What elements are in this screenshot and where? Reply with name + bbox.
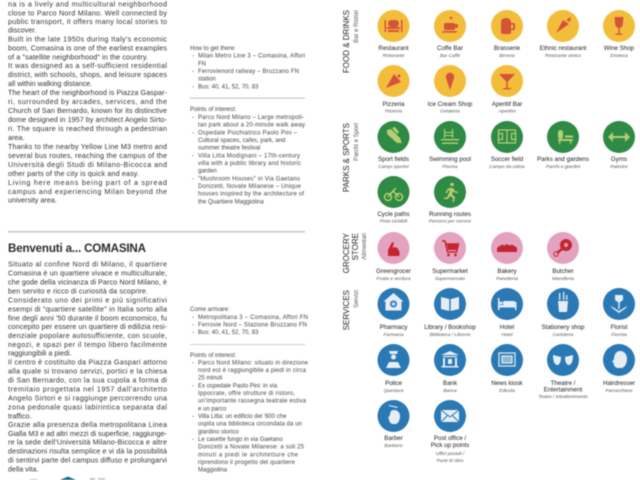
- item: News kiosk: News kiosk: [491, 380, 524, 387]
- text block: Italian points of interest: Le casette fungo in via Gaetano: [198, 437, 283, 443]
- item: Greengrocer: Greengrocer: [376, 268, 411, 275]
- text block: Italian points of interest: riprendono il progetto del quartiere: [198, 460, 296, 466]
- text block: Italian introduction: raggiungibili a piedi.: [8, 349, 72, 358]
- item: Wine Shop: Wine Shop: [604, 45, 635, 52]
- item: Cycle paths: Piste ciclabili: [380, 218, 408, 224]
- text block: Italian introduction: Comasina è un quartiere vivace e multiculturale,: [8, 269, 167, 278]
- text block: Italian points of interest: Maggiolina: [198, 468, 228, 474]
- text block: Italian points of interest: -: [192, 384, 194, 390]
- item: Soccer field: Campo da calcio: [489, 164, 525, 170]
- text block: Italian points of interest: e un parco: [198, 406, 227, 412]
- text block: Italian points of interest: [190, 353, 309, 474]
- text block: Italian introduction: che gode della vicinanza di Parco Nord Milano, è: [8, 278, 167, 287]
- item: Parks and gardens: [537, 121, 589, 170]
- item: Aperitif Bar: [491, 65, 523, 114]
- item: Police: Police: [385, 380, 402, 387]
- text block: English how to get there: station: [198, 77, 216, 83]
- item: Soccer field: Soccer field: [491, 156, 524, 163]
- item: Barber: Barber: [384, 435, 403, 442]
- text block: Italian introduction: Il centro è costituito da Piazza Gaspari attorno: [8, 358, 167, 367]
- item: Ethnic restaurant: Ethnic restaurant: [540, 45, 587, 52]
- item: Pizzeria: Pizzeria: [382, 101, 405, 108]
- item: Hairdresser: Parrucchiere: [605, 388, 633, 394]
- text block: English points of interest: Parco Nord Milano – Large metropoli-: [198, 115, 304, 121]
- item: Soccer field: [489, 121, 525, 170]
- text block: English introduction: ri, surrounded by arcades, services, and the: [8, 97, 167, 106]
- text block: Italian points of interest: -: [192, 437, 194, 443]
- text block: English points of interest: Donizetti, Novate Milanese – Unique: [198, 184, 302, 190]
- text block: English introduction: Church of San Bernardo, known for its distinctive: [8, 106, 167, 115]
- item: Coffee Bar: [434, 10, 466, 59]
- text block: Italian introduction: denziale popolare autosufficiente, con scuole,: [8, 331, 167, 340]
- item: Post office and Pick up points: [431, 400, 469, 464]
- text block: Italian points of interest: Villa Litta: un edificio del '600 che: [198, 414, 287, 420]
- text block: Italian introduction: della vita.: [8, 464, 38, 473]
- item: Hairdresser: Hairdresser: [603, 380, 635, 387]
- item: Pharmacy: Farmacia: [384, 332, 404, 338]
- text block: Italian introduction: Considerato uno dei primi e più significativi: [8, 296, 167, 305]
- item: Coffee Bar: Coffe Bar: [437, 45, 463, 52]
- text block: Italian introduction: esempi di "quartiere satellite" in Italia sorto alla: [8, 304, 167, 313]
- category label: Services: [342, 290, 360, 330]
- text block: English how to get there: How to get there:: [190, 46, 236, 52]
- item: Police: Questura: [384, 388, 404, 394]
- item: Hotel: Hotel: [500, 324, 514, 331]
- item: Post office and Pick up points: Post office /: [434, 435, 466, 442]
- text block: Italian how to get there: Metropolitana 3 – Comasina, Affori FN: [198, 315, 308, 321]
- text block: English points of interest: [190, 107, 305, 205]
- text block: English points of interest: Ospedale Psichiatrico Paolo Pini –: [198, 130, 298, 136]
- divider: Italian right column: [190, 344, 305, 345]
- text block: English how to get there: -: [192, 69, 194, 75]
- item: Parks and gardens: Parchi e giardini: [546, 164, 581, 170]
- text block: English introduction: boom, Comasina is one of the earliest examples: [8, 44, 167, 53]
- text block: Italian points of interest: -: [192, 414, 194, 420]
- item: Running routes: Running routes: [429, 211, 471, 218]
- text block: English introduction: Università degli Studi di Milano-Bicocca and: [8, 160, 167, 169]
- text block: Italian introduction: di San Bernardo, con la sua cupola a forma di: [8, 375, 167, 384]
- text block: English how to get there: Ferrovienord railway – Bruzzano FN: [198, 69, 299, 75]
- item: Hotel: Hotel: [501, 332, 514, 338]
- text block: Italian points of interest: minuti a piedi le architetture che: [198, 452, 299, 458]
- item: Butcher: [547, 232, 579, 282]
- item: Supermarket: Supermercato: [435, 276, 465, 282]
- text block: English introduction: dome designed in 1957 by architect Angelo Sirto-: [8, 115, 168, 124]
- text block: English how to get there: Milan Metro Line 3 – Comasina, Affori: [198, 54, 305, 60]
- item: Pizzeria: [378, 65, 410, 114]
- item: Theatre and Entertainment: Theatre /: [551, 380, 576, 387]
- text block: English introduction: several bus routes, reaching the campus of the: [8, 151, 167, 160]
- text block: English points of interest: Points of interest:: [190, 107, 237, 113]
- item: Swimming pool: Swimming pool: [429, 156, 471, 163]
- text block: English introduction: university area.: [8, 196, 57, 204]
- item: Theatre and Entertainment: [538, 344, 588, 400]
- item: Pharmacy: Pharmacy: [380, 324, 408, 331]
- text block: Italian points of interest: giardino storico: [198, 429, 239, 435]
- text block: English introduction: close to Parco Nord Milano. Well connected by: [8, 8, 167, 17]
- item: Restaurant: Restaurant: [378, 45, 409, 52]
- text block: English points of interest: houses inspired by the architecture of: [198, 192, 304, 198]
- divider: between languages: [8, 231, 305, 232]
- item: Gyms: Gyms: [611, 156, 627, 163]
- item: Florist: Fiorista: [611, 332, 627, 338]
- category label: Parks and Sports: PARKS & SPORTS: [342, 123, 351, 192]
- item: Hotel: [491, 288, 523, 338]
- item: Brasserie: Birreria: [499, 53, 515, 59]
- text block: Italian how to get there: Ferrovie Nord – Stazione Bruzzano FN: [198, 322, 307, 328]
- item: Supermarket: Supermarket: [432, 268, 468, 275]
- text block: English points of interest: -: [192, 153, 194, 159]
- item: News kiosk: [491, 344, 524, 394]
- item: Cycle paths: [377, 176, 410, 224]
- item: Bank: Bank: [443, 380, 458, 387]
- category label: Grocery Store: Alimentari: [362, 233, 368, 260]
- category label: Services: SERVICES: [342, 290, 351, 330]
- text block: Italian introduction: fine degli anni '50 durante il boom economico, fu: [8, 313, 167, 322]
- text block: Italian points of interest: ospita una biblioteca circondata da un: [198, 422, 302, 428]
- text block: Italian introduction: zona pedonale quasi labirintica separata dal: [8, 402, 167, 411]
- text block: Italian introduction: Angelo Sirtori e si raggiunge percorrendo una: [8, 393, 167, 402]
- item: Supermarket: [432, 232, 468, 282]
- text block: Italian how to get there: -: [192, 330, 194, 336]
- item: Sport fields: Sport fields: [378, 156, 409, 163]
- item: Greengrocer: Frutta e verdura: [376, 276, 411, 282]
- item: Bank: [434, 344, 466, 394]
- item: Running routes: [429, 176, 472, 224]
- category label: Grocery Store: [342, 232, 368, 273]
- text block: English points of interest: tan park about a 20-minute walk away: [198, 123, 305, 129]
- item: Restaurant: [378, 10, 410, 59]
- item: Sport fields: Campi sportivi: [378, 164, 410, 170]
- category label: Parks and Sports: [342, 123, 360, 192]
- text block: English introduction: It was designed as a self-sufficient residential: [8, 61, 167, 70]
- item: Parks and gardens: Parks and gardens: [537, 156, 589, 163]
- item: Ice Cream Shop: [428, 65, 473, 114]
- text block: Italian points of interest: Ippocrate, offre strutture di ristoro,: [198, 391, 295, 397]
- text block: English introduction: Built in the late 1950s during Italy's economic: [8, 34, 167, 43]
- text block: English points of interest: garden: [198, 169, 217, 175]
- category label: Grocery Store: STORE: [351, 233, 360, 260]
- item: Pharmacy: [378, 288, 410, 338]
- text block: English introduction: area.: [8, 133, 24, 142]
- item: Gyms: [603, 121, 635, 170]
- item: Gyms: Palestre: [610, 164, 628, 170]
- text block: English points of interest: Villa Litta Modignani – 17th-century: [198, 153, 300, 159]
- text block: Italian introduction: destinazioni risulta semplice e vi dà la possibilità: [8, 447, 167, 456]
- item: Florist: [603, 288, 635, 338]
- item: Swimming pool: [429, 121, 471, 170]
- text block: Italian how to get there: Come arrivare:: [190, 307, 230, 313]
- text block: English points of interest: the Quartiere Maggiolina: [198, 199, 264, 205]
- item: Ethnic restaurant: Ristorante etnico: [545, 53, 581, 59]
- item: Brasserie: Brasserie: [494, 45, 521, 52]
- item: Aperitif Bar: Aperitif Bar: [492, 101, 522, 108]
- item: Wine Shop: Enoteca: [610, 53, 628, 59]
- item: Theatre and Entertainment: Entertainment: [544, 386, 583, 394]
- divider: English right column: [190, 98, 305, 99]
- text block: English points of interest: -: [192, 130, 194, 136]
- item: Florist: Florist: [611, 324, 628, 331]
- text block: Italian introduction: Grazie alla presenza della metropolitana Linea: [8, 420, 167, 429]
- text block: English how to get there: -: [192, 84, 194, 90]
- text block: English introduction: Thanks to the nearby Yellow Line M3 metro and: [8, 142, 167, 151]
- item: Bakery: Bakery: [497, 268, 518, 275]
- text block: Italian introduction: Gialla M3 e ad altri mezzi di superficie, raggiunge-: [8, 429, 168, 438]
- item: Stationery shop: Stationery shop: [542, 324, 585, 331]
- item: Bank: Banca: [443, 388, 457, 394]
- text block: Italian points of interest: Ex ospedale Paolo Pini: in via: [198, 384, 278, 390]
- item: Butcher: Butcher: [552, 268, 574, 275]
- item: Running routes: Percorsi per correre: [429, 218, 472, 224]
- text block: Italian points of interest: Points of interest:: [190, 353, 237, 359]
- item: Restaurant: Ristorante: [383, 53, 405, 59]
- item: Barber: [378, 400, 410, 449]
- text block: Italian introduction: [8, 259, 168, 473]
- text block: Italian points of interest: 25 minuti: [198, 376, 222, 382]
- item: Cycle paths: Cycle paths: [377, 211, 410, 218]
- text block: Italian introduction: ben servito e ricco di curiosità da scoprire.: [8, 287, 148, 296]
- text block: Italian introduction: negozi, e spazi per il tempo libero facilmente: [8, 340, 167, 349]
- item: Post office and Pick up points: Pick up points: [431, 442, 469, 449]
- category label: Parks and Sports: Parchi e Sport: [354, 123, 360, 161]
- heading: Benvenuti a Comasina: Benvenuti a... COMASINA: [8, 242, 147, 255]
- item: News kiosk: Edicola: [499, 388, 515, 394]
- item: Pizzeria: Pizzeria: [385, 108, 402, 114]
- logo: cropped at bottom edge: [30, 476, 105, 480]
- item: Greengrocer: [376, 232, 411, 282]
- text block: English introduction: [8, 0, 168, 204]
- item: Aperitif Bar: Aperitivi: [497, 108, 516, 114]
- text block: Italian introduction: Situato al confine Nord di Milano, il quartiere: [8, 259, 167, 268]
- item: Police: [378, 344, 410, 394]
- text block: Italian introduction: di sentirvi parte del campus diffuso e prolungarvi: [8, 456, 167, 465]
- text block: Italian points of interest: Donizetti a Novate Milanese: a soli 25: [198, 445, 305, 451]
- item: Library and Bookshop: [424, 288, 476, 338]
- text block: English introduction: district, with schools, shops, and leisure spaces: [8, 70, 167, 79]
- item: Hairdresser: [603, 344, 635, 394]
- category label: Food and Drinks: [342, 10, 360, 73]
- text block: English points of interest: "Mushroom Houses" in Via Gaetano: [198, 176, 301, 182]
- text block: English points of interest: -: [192, 176, 194, 182]
- text block: Italian how to get there: -: [192, 322, 194, 328]
- category label: Grocery Store: GROCERY: [342, 232, 351, 273]
- item: Ice Cream Shop: Ice Cream Shop: [428, 101, 473, 108]
- item: Swimming pool: Piscina: [442, 164, 458, 170]
- text block: Italian introduction: concepito per essere un quartiere di edilizia resi-: [8, 322, 168, 331]
- text block: English introduction: Living here means being part of a spread: [8, 178, 167, 187]
- item: Library and Bookshop: Library / Bookshop: [424, 324, 476, 331]
- text block: English introduction: campus and experiencing Milan beyond the: [8, 187, 167, 196]
- item: Brasserie: [491, 10, 523, 59]
- text block: Italian how to get there: -: [192, 315, 194, 321]
- text block: English how to get there: -: [192, 54, 194, 60]
- item: Bakery: Panetteria: [496, 276, 518, 282]
- text block: Italian how to get there: [190, 307, 308, 336]
- category label: Food and Drinks: FOOD & DRINKS: [342, 10, 351, 73]
- item: Ethnic restaurant: [540, 10, 587, 59]
- item: Post office and Pick up points: Uffici postali /: [436, 451, 465, 457]
- item: Stationery shop: [542, 288, 585, 338]
- text block: Italian points of interest: un'importante rassegna teatrale estiva: [198, 399, 307, 405]
- text block: English how to get there: [190, 46, 305, 90]
- item: Butcher: Macelleria: [552, 276, 574, 282]
- item: Stationery shop: Cartoleria: [553, 332, 574, 338]
- text block: Italian introduction: traffico.: [8, 411, 31, 420]
- item: Barber: Barbiere: [384, 443, 403, 449]
- text block: English introduction: all within walking distance.: [8, 79, 92, 88]
- text block: English points of interest: Cultural spaces, cafes, park, and: [198, 138, 285, 144]
- text block: English introduction: other parts of the city is quick and easy.: [8, 169, 139, 178]
- text block: English introduction: discover.: [8, 25, 36, 34]
- item: Library and Bookshop: Biblioteca / Libreria: [430, 332, 471, 338]
- item: Ice Cream Shop: Gelateria: [440, 108, 460, 114]
- text block: English points of interest: summer theatre festival: [198, 146, 260, 152]
- item: Theatre and Entertainment: Teatro / Intrattenimento: [538, 394, 588, 400]
- item: Sport fields: [378, 121, 410, 170]
- text block: Italian how to get there: Bus: 40, 41, 52, 70, 83: [198, 330, 259, 336]
- item: Bakery: [491, 232, 523, 282]
- text block: Italian points of interest: nord est è raggiungibile a piedi in circa: [198, 368, 307, 374]
- text block: Italian introduction: re la sede dell'Università Milano-Bicocca e altre: [8, 438, 167, 447]
- text block: Italian points of interest: Parco Nord Milano: situato in direzione: [198, 360, 309, 366]
- text block: Italian introduction: alla quale si trovano servizi, portici e la chiesa: [8, 367, 167, 376]
- text block: English points of interest: -: [192, 115, 194, 121]
- item: Post office and Pick up points: Punti di ritiro: [437, 458, 464, 464]
- item: Coffee Bar: Bar Caffè: [440, 53, 460, 59]
- text block: English how to get there: Bus: 40, 41, 52, 70, 83: [198, 84, 259, 90]
- text block: English introduction: ri. The square is reached through a pedestrian: [8, 124, 167, 133]
- text block: Italian points of interest: -: [192, 360, 194, 366]
- text block: English introduction: public transport, it offers many local stories to: [8, 17, 167, 26]
- item: Wine Shop: [603, 10, 635, 59]
- category label: Services: Servizi: [354, 290, 360, 308]
- text block: English introduction: of a "satellite neighborhood" in the country.: [8, 52, 148, 61]
- text block: Italian introduction: tremitaio progettata nel 1957 dall'architetto: [8, 384, 167, 393]
- text block: English how to get there: FN: [198, 61, 206, 67]
- category label: Food and Drinks: Bar e Ristori: [354, 10, 360, 43]
- text block: English introduction: The heart of the neighborhood is Piazza Gaspar-: [8, 88, 168, 97]
- text block: English points of interest: villa with a public library and historic: [198, 161, 301, 167]
